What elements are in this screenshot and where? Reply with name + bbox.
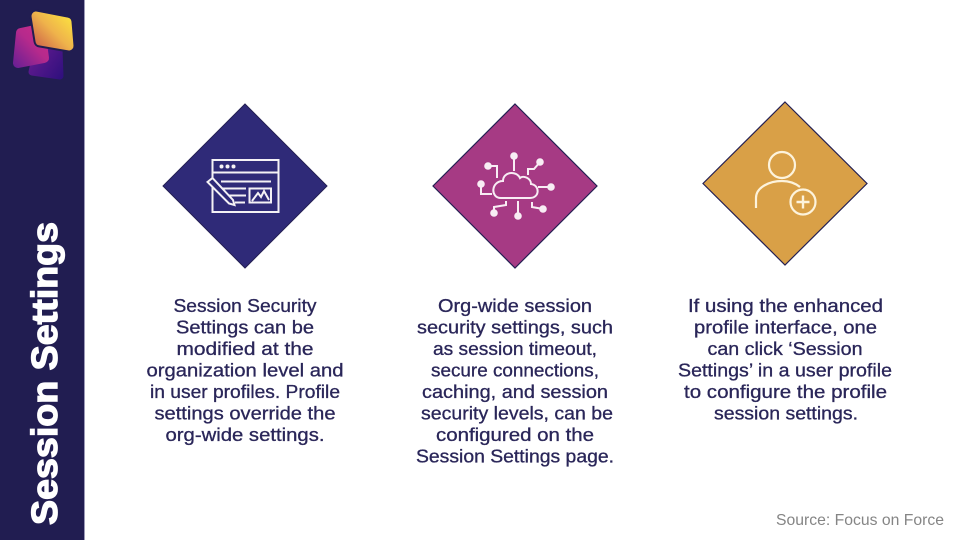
logo: [18, 16, 69, 76]
text block: org-wide session security settings: security settings, such: [417, 318, 613, 338]
text block: organization and profile settings: Session Security: [174, 296, 316, 316]
text block: org-wide session security settings: caching, and session: [422, 382, 608, 402]
text block: enhanced profile interface: can click ‘Session: [708, 339, 862, 359]
text block: org-wide session security settings: configured on the: [436, 425, 594, 445]
icon: navy diamond: [163, 104, 327, 268]
text block: enhanced profile interface: If using the enhanced: [688, 296, 883, 316]
source note: Source: Focus on Force: [776, 512, 944, 529]
text block: organization and profile settings: modified at the: [176, 339, 314, 359]
icon: gold diamond: [703, 102, 867, 265]
text block: enhanced profile interface: session settings.: [714, 404, 858, 424]
panel: organization and profile settings: [146, 104, 344, 445]
text block: organization and profile settings: in user profiles. Profile: [150, 382, 340, 402]
panel: org-wide session security settings: [416, 104, 614, 466]
text block: enhanced profile interface: profile interface, one: [694, 318, 877, 338]
text block: org-wide session security settings: Org-wide session: [438, 296, 592, 316]
text block: enhanced profile interface: [678, 296, 892, 424]
icon: user with plus: [756, 152, 816, 214]
text block: organization and profile settings: organization level and: [146, 360, 344, 380]
text block: organization and profile settings: org-wide settings.: [166, 425, 324, 445]
text block: enhanced profile interface: to configure the profile: [684, 382, 887, 402]
text block: org-wide session security settings: as session timeout,: [433, 339, 597, 359]
icon: browser window with pencil: [208, 160, 278, 212]
text block: organization and profile settings: [146, 296, 344, 445]
text block: org-wide session security settings: Session Settings page.: [416, 446, 614, 466]
panel: enhanced profile interface: [678, 102, 892, 424]
text block: organization and profile settings: Settings can be: [176, 318, 314, 338]
text block: org-wide session security settings: security levels, can be: [421, 404, 613, 424]
text block: organization and profile settings: settings override the: [154, 404, 336, 424]
sidebar: [0, 0, 85, 540]
title: Session Settings: Session Settings: [24, 222, 65, 525]
text block: org-wide session security settings: secure connections,: [431, 360, 599, 380]
text block: org-wide session security settings: [416, 296, 614, 466]
icon: magenta diamond: [433, 104, 597, 268]
text block: enhanced profile interface: Settings’ in a user profile: [678, 360, 892, 380]
icon: cloud network: [477, 152, 555, 220]
